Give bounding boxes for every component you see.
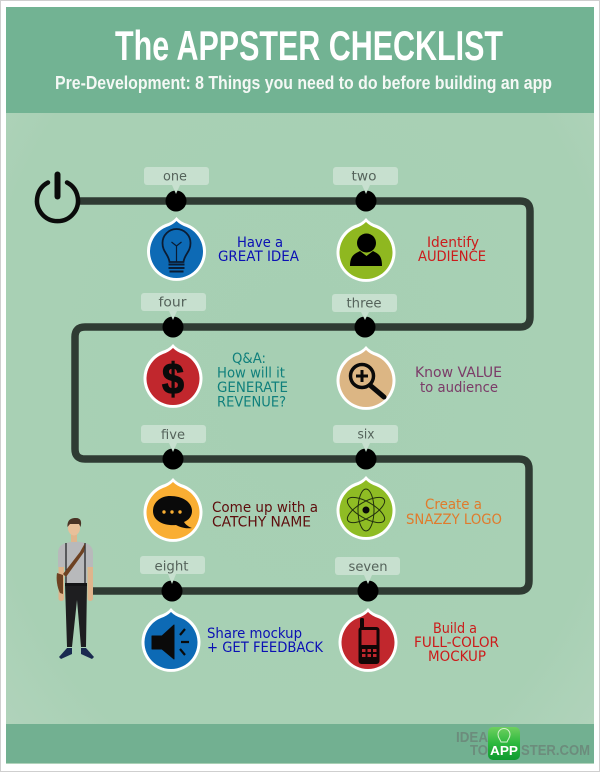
text: identify audience: Identify bbox=[427, 235, 479, 251]
text: have a great idea: GREAT IDEA bbox=[218, 249, 300, 265]
text: identify audience bbox=[418, 235, 486, 265]
text: share mockup: Share mockup bbox=[207, 626, 302, 642]
text: Q and A revenue: REVENUE? bbox=[217, 394, 286, 410]
logo: idea to appster: IDEA bbox=[456, 730, 488, 746]
text: catchy name: CATCHY NAME bbox=[212, 514, 311, 530]
icon: speech bubble bbox=[144, 478, 202, 542]
step one marker: one bbox=[163, 170, 187, 184]
figure: man with satchel bbox=[57, 518, 94, 659]
icon: megaphone speaker bbox=[142, 608, 200, 672]
text: catchy name bbox=[212, 500, 318, 530]
icon: magnifying glass bbox=[336, 346, 396, 410]
text: know value: to audience bbox=[420, 380, 498, 396]
icon: dollar sign: $ bbox=[162, 355, 184, 404]
text: have a great idea bbox=[218, 235, 300, 265]
step eight marker: eight bbox=[154, 560, 188, 574]
checklist path line bbox=[75, 201, 530, 591]
step one marker bbox=[144, 167, 209, 212]
logo: idea to appster: APP bbox=[490, 743, 518, 758]
text: Q and A revenue: Q&A: bbox=[232, 351, 266, 367]
step four marker: four bbox=[158, 296, 187, 310]
logo: idea to appster: TO bbox=[470, 743, 488, 759]
logo: idea to appster bbox=[456, 727, 590, 760]
step seven marker: seven bbox=[348, 560, 388, 575]
step six marker bbox=[333, 425, 398, 470]
text: snazzy logo bbox=[406, 497, 502, 528]
text: full-color mockup: MOCKUP bbox=[428, 649, 486, 665]
step two marker: two bbox=[352, 170, 377, 184]
text: snazzy logo: Create a bbox=[425, 497, 482, 513]
header banner bbox=[6, 7, 594, 113]
step five marker: five bbox=[161, 428, 185, 443]
step two marker bbox=[333, 167, 398, 212]
icon: dollar sign bbox=[144, 344, 202, 408]
text: snazzy logo: SNAZZY LOGO bbox=[406, 512, 502, 528]
text: full-color mockup: FULL-COLOR bbox=[414, 635, 499, 651]
text: share mockup bbox=[207, 626, 324, 656]
text: share mockup: + GET FEEDBACK bbox=[207, 640, 324, 656]
step eight marker bbox=[140, 556, 205, 602]
text: full-color mockup: Build a bbox=[433, 621, 477, 637]
step four marker bbox=[141, 293, 206, 338]
step three marker: three bbox=[346, 296, 382, 312]
text: know value bbox=[415, 365, 502, 396]
text: know value: Know VALUE bbox=[415, 365, 502, 381]
step five marker bbox=[141, 425, 206, 470]
text: catchy name: Come up with a bbox=[212, 500, 318, 516]
logo: idea to appster: STER.COM bbox=[521, 743, 590, 759]
text: have a great idea: Have a bbox=[237, 235, 283, 251]
text: Q and A revenue bbox=[217, 351, 288, 410]
icon: atom logo bbox=[336, 476, 396, 540]
text: Q and A revenue: GENERATE bbox=[217, 380, 288, 396]
icon: mobile phone bbox=[338, 608, 398, 672]
step seven marker bbox=[335, 557, 400, 602]
footer band bbox=[6, 724, 594, 763]
step six marker: six bbox=[358, 428, 375, 442]
icon: person audience bbox=[336, 218, 396, 282]
step three marker bbox=[332, 294, 397, 338]
icon: light bulb bbox=[147, 217, 206, 281]
icon: power symbol bbox=[37, 172, 78, 221]
text: Q and A revenue: How will it bbox=[217, 366, 286, 382]
text: full-color mockup bbox=[414, 621, 499, 665]
text: identify audience: AUDIENCE bbox=[418, 249, 486, 265]
